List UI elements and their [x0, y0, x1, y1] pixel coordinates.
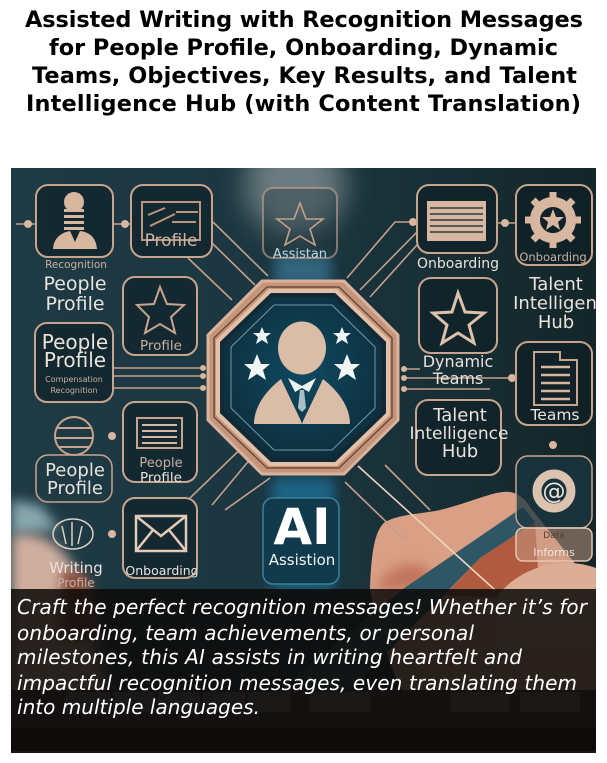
caption overlay: onboarding, team achievements, or personal [17, 621, 474, 645]
label: dynamic teams: Teams [432, 369, 483, 388]
label: talent intelligence hub [514, 276, 596, 328]
card: profile star [123, 277, 197, 355]
icon: stars [244, 327, 360, 380]
card: profile image: Profile [145, 231, 197, 251]
card: gear star: Onboarding [519, 250, 587, 264]
card: ai assistant: AI [273, 498, 331, 556]
card: onboarding list [417, 185, 499, 272]
card: people profile list: Profile [140, 470, 182, 486]
card: talent intelligence hub: Hub [442, 441, 478, 462]
title [25, 7, 583, 117]
caption overlay: into multiple languages. [17, 695, 260, 719]
card: people profile text: People [42, 330, 108, 354]
central octagon badge [208, 281, 398, 474]
right hand [369, 492, 596, 690]
label: dynamic teams: Dynamic [423, 352, 493, 371]
card: talent intelligence hub: Intelligence [410, 424, 508, 444]
icon: brain writing: Profile [57, 576, 95, 590]
card: gear star [516, 185, 592, 265]
pen [376, 507, 535, 652]
card: people profile list: People [139, 456, 183, 471]
card: people profile text: Compensation [45, 375, 103, 384]
illustration panel [11, 135, 597, 753]
card: dynamic star [419, 278, 497, 353]
card: envelope onboarding [123, 498, 199, 578]
card: assistant star [263, 188, 337, 262]
left hand [11, 500, 110, 700]
label: talent intelligence hub: Hub [538, 312, 574, 333]
card: talent intelligence hub [410, 400, 508, 475]
card: people profile outline: People [45, 460, 105, 481]
card: people profile list [123, 402, 197, 486]
card: people profile outline: Profile [47, 478, 103, 499]
card: onboarding list: Onboarding [417, 256, 499, 272]
card: people profile text [35, 323, 113, 402]
card: email gear [516, 456, 592, 561]
card: people profile text: Profile [44, 348, 106, 372]
card: email gear: @ [542, 479, 566, 505]
title: Teams, Objectives, Key Results, and Talent [32, 63, 577, 89]
connector lines [16, 222, 516, 590]
card: talent intelligence hub: Talent [432, 405, 487, 426]
title: Intelligence Hub (with Content Translation) [26, 91, 581, 117]
icon: brain writing: Writing [49, 559, 103, 577]
caption overlay: impactful recognition messages, even translating them [17, 671, 577, 695]
label: talent intelligence hub: Talent [528, 274, 583, 295]
icon: person [254, 322, 350, 424]
card: teams document: Teams [529, 406, 580, 424]
card: people globe [55, 417, 93, 455]
card: recognition [36, 185, 113, 271]
card: envelope onboarding: Onboarding [125, 563, 199, 578]
card: profile star: Profile [140, 338, 182, 354]
keyboard [11, 690, 596, 753]
card: recognition: Recognition [45, 259, 107, 271]
caption overlay [11, 589, 596, 753]
card: ai assistant [263, 498, 339, 584]
caption overlay: milestones, this AI assists in writing heartfelt and [17, 645, 522, 669]
label: people profile [45, 276, 106, 310]
label: talent intelligence hub: Intelligen [513, 293, 597, 314]
label: people profile: Profile [45, 293, 105, 315]
label: dynamic teams [424, 355, 492, 384]
title: Assisted Writing with Recognition Messages [25, 7, 583, 33]
label: people profile: People [43, 273, 107, 295]
card: profile image [131, 185, 212, 257]
card: people profile text: Recognition [50, 386, 98, 395]
card: people profile outline [36, 455, 112, 502]
card: email gear: Informs [533, 546, 575, 559]
card: email gear: Data [543, 531, 565, 541]
title: for People Profile, Onboarding, Dynamic [49, 35, 558, 61]
card: ai assistant: Assistion [269, 551, 335, 569]
card: assistant star: Assistan [273, 247, 327, 262]
icon: brain writing [49, 519, 103, 590]
caption overlay: Craft the perfect recognition messages! Whether it’s for [17, 595, 589, 619]
card: teams document [516, 342, 592, 425]
